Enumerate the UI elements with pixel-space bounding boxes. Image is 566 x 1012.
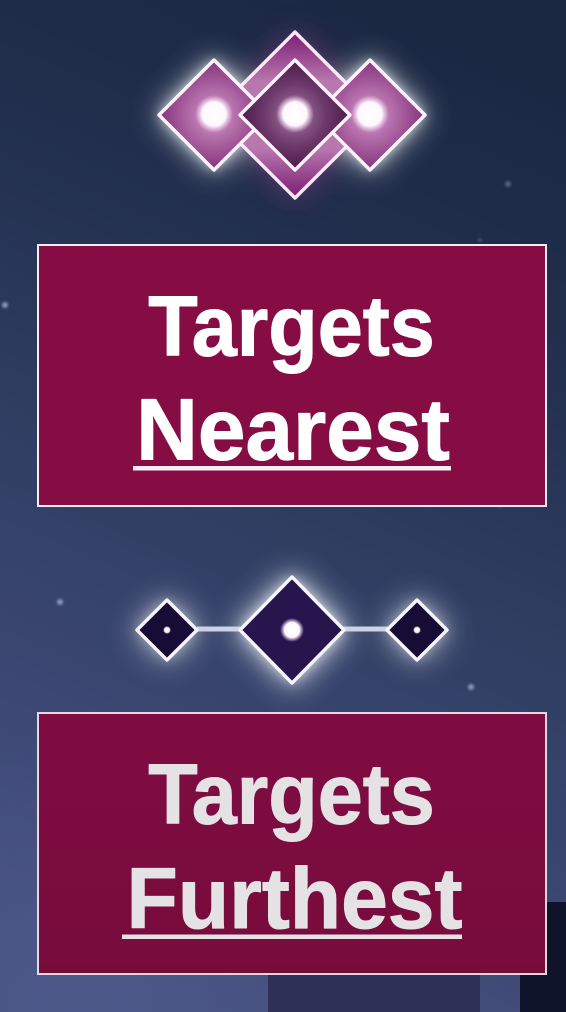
heading: nearest: Nearest xyxy=(136,382,450,479)
right diamond xyxy=(315,60,425,170)
underline xyxy=(133,466,451,470)
panel: targets furthest xyxy=(38,713,546,974)
underline xyxy=(122,934,462,939)
left diamond xyxy=(159,60,269,170)
heading: targets: Targets xyxy=(148,279,435,374)
icon: targets furthest, linked diamonds xyxy=(133,572,451,688)
connector lines xyxy=(197,626,388,632)
back diamond xyxy=(212,32,378,198)
centre diamond xyxy=(240,60,350,170)
icon: targets nearest, overlapping diamonds xyxy=(157,32,427,198)
heading: targets: Targets xyxy=(148,747,435,842)
glowing cores xyxy=(195,95,389,133)
right diamond xyxy=(387,600,447,660)
centre diamond xyxy=(240,577,344,683)
heading: furthest: Furthest xyxy=(127,851,462,947)
left diamond xyxy=(137,600,197,660)
glowing dots xyxy=(163,618,421,642)
panel: targets nearest xyxy=(38,245,546,506)
